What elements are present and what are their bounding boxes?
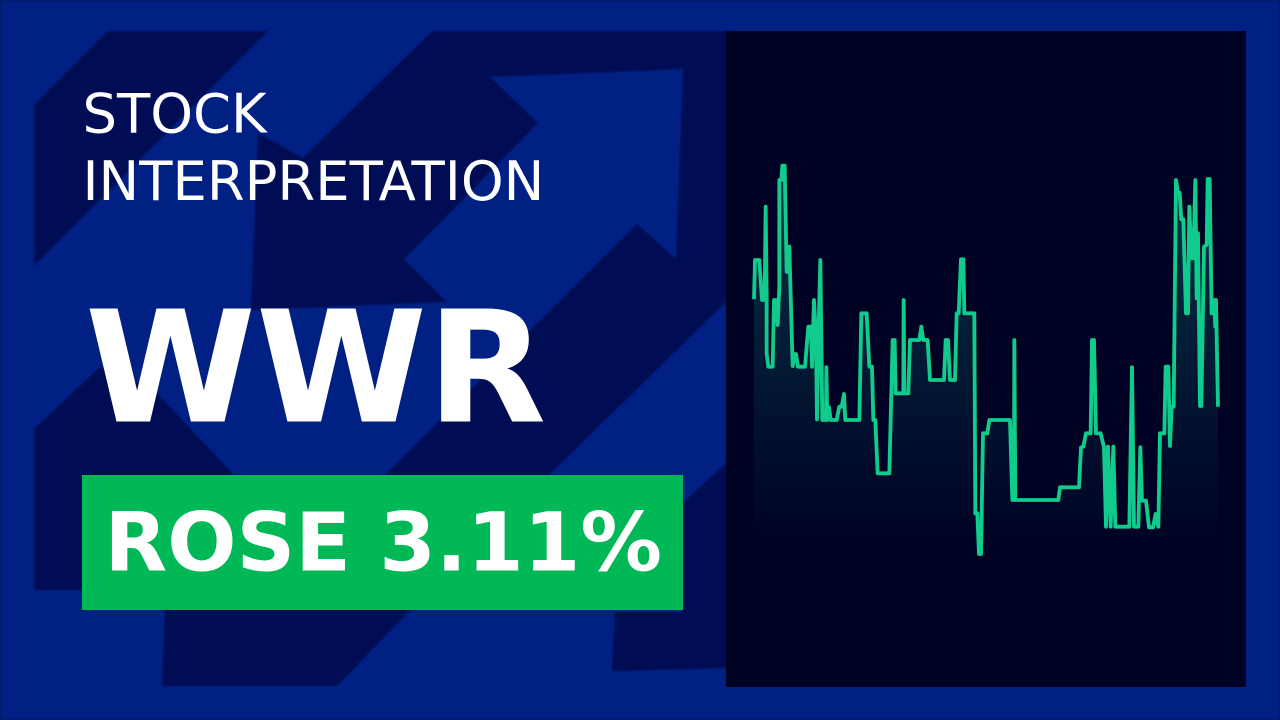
change badge xyxy=(82,475,683,610)
chart panel xyxy=(726,31,1246,687)
title: STOCK xyxy=(82,83,268,146)
area fill xyxy=(754,166,1218,563)
title xyxy=(82,83,544,213)
background arrows xyxy=(34,31,730,686)
title: INTERPRETATION xyxy=(82,150,544,213)
price line xyxy=(754,166,1218,554)
line chart xyxy=(754,166,1218,563)
change badge: ROSE 3.11% xyxy=(104,496,662,590)
ticker: WWR xyxy=(85,278,546,458)
